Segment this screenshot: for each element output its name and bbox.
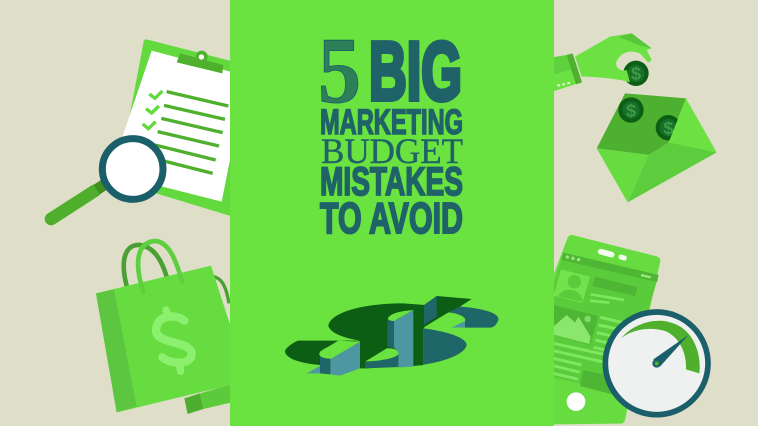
gauge arc	[621, 321, 700, 373]
icon: phone with speed gauge	[550, 239, 708, 420]
clipboard clip	[177, 51, 223, 73]
envelope bottom left	[597, 148, 648, 202]
main bag side	[96, 289, 137, 412]
title word MARKETING: MARKETING	[320, 102, 463, 142]
hand	[575, 33, 652, 82]
shirt cuff	[550, 53, 582, 92]
coin in hand	[623, 61, 649, 86]
coin in hand: $	[631, 64, 641, 84]
title words TO AVOID: TO AVOID	[320, 195, 463, 243]
second coin in envelope: $	[663, 118, 673, 138]
icon: shopping bags	[96, 241, 235, 414]
coin in envelope: $	[626, 100, 636, 120]
home button	[567, 392, 585, 411]
title	[318, 19, 463, 243]
back bag	[184, 277, 235, 414]
heading block	[592, 277, 637, 296]
central green panel	[230, 0, 554, 426]
image placeholder	[553, 305, 598, 345]
envelope bottom right	[628, 142, 717, 202]
center column	[387, 310, 413, 367]
title word BUDGET: BUDGET	[321, 131, 463, 171]
text lines	[590, 294, 624, 303]
coin in envelope	[618, 97, 644, 123]
envelope inner flap	[597, 93, 686, 155]
browser bar	[561, 253, 659, 282]
main bag body	[96, 266, 235, 412]
front handle	[138, 241, 182, 292]
gauge dial	[605, 312, 708, 415]
magnifier handle	[51, 182, 108, 219]
phone screen	[550, 253, 659, 393]
second coin in envelope	[656, 115, 681, 140]
icon: hand dropping coin into envelope	[550, 33, 717, 202]
title word BIG: BIG	[369, 24, 462, 118]
phone speaker	[601, 252, 624, 258]
checklist lines	[153, 92, 228, 173]
clipboard board	[120, 42, 270, 213]
clipboard paper	[110, 51, 247, 202]
upper right cutout	[423, 312, 465, 328]
phone body	[550, 239, 656, 420]
lower block	[580, 370, 620, 395]
magnifier lens	[102, 139, 163, 199]
icon: dollar sign shaped hole	[285, 296, 498, 376]
hole teal wall lower	[413, 328, 467, 366]
center inner step	[365, 348, 399, 368]
icon: clipboard with magnifier	[51, 42, 270, 219]
upper wall face	[424, 296, 437, 325]
icon: dollar sign	[156, 310, 192, 371]
hole dark wall	[285, 296, 472, 368]
back handle	[124, 245, 167, 286]
upper right step	[452, 321, 465, 328]
envelope right flap	[668, 98, 717, 152]
title number 5: 5	[318, 19, 361, 123]
gauge needle	[652, 335, 688, 368]
title word MISTAKES: MISTAKES	[320, 160, 463, 204]
profile photo	[553, 269, 590, 303]
article lines	[553, 317, 633, 379]
hole teal wall right	[448, 307, 498, 328]
checklist ticks	[143, 91, 162, 129]
left column	[307, 341, 360, 376]
